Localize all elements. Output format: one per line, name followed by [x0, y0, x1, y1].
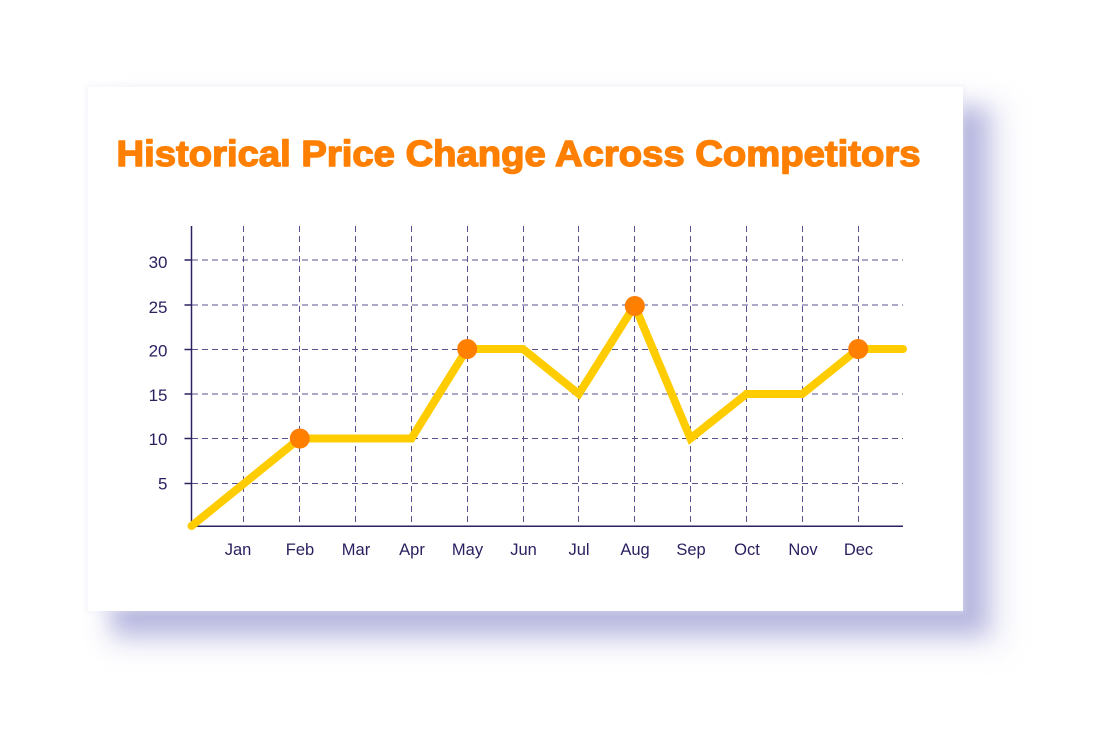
x-axis labels: Feb	[286, 541, 314, 559]
y-axis labels: 25	[149, 298, 168, 317]
line chart	[149, 226, 903, 559]
highlighted data points	[290, 296, 868, 448]
y-axis labels: 10	[149, 430, 168, 449]
panel: card with shadow	[86, 85, 1008, 650]
y-axis labels	[149, 253, 168, 494]
x-axis labels: Jul	[568, 541, 590, 559]
title: Historical Price Change Across Competitors	[116, 133, 921, 174]
x-axis labels: Nov	[788, 541, 818, 559]
chart grid	[192, 226, 903, 526]
y-axis labels: 30	[149, 253, 168, 272]
x-axis labels: Sep	[676, 541, 706, 559]
x-axis labels: Jan	[225, 541, 251, 559]
x-axis labels: Mar	[342, 541, 371, 559]
y-axis labels: 20	[149, 342, 168, 360]
x-axis labels: Apr	[399, 541, 425, 559]
price line	[192, 306, 903, 526]
x-axis labels: Dec	[844, 541, 873, 559]
x-axis labels: Aug	[620, 541, 650, 559]
x-axis labels	[225, 541, 873, 559]
x-axis labels: May	[452, 541, 484, 559]
y-axis labels: 5	[158, 474, 168, 494]
y-axis labels: 15	[149, 386, 168, 405]
x-axis labels: Jun	[510, 541, 537, 559]
x-axis labels: Oct	[734, 541, 760, 559]
chart axes	[184, 226, 903, 526]
